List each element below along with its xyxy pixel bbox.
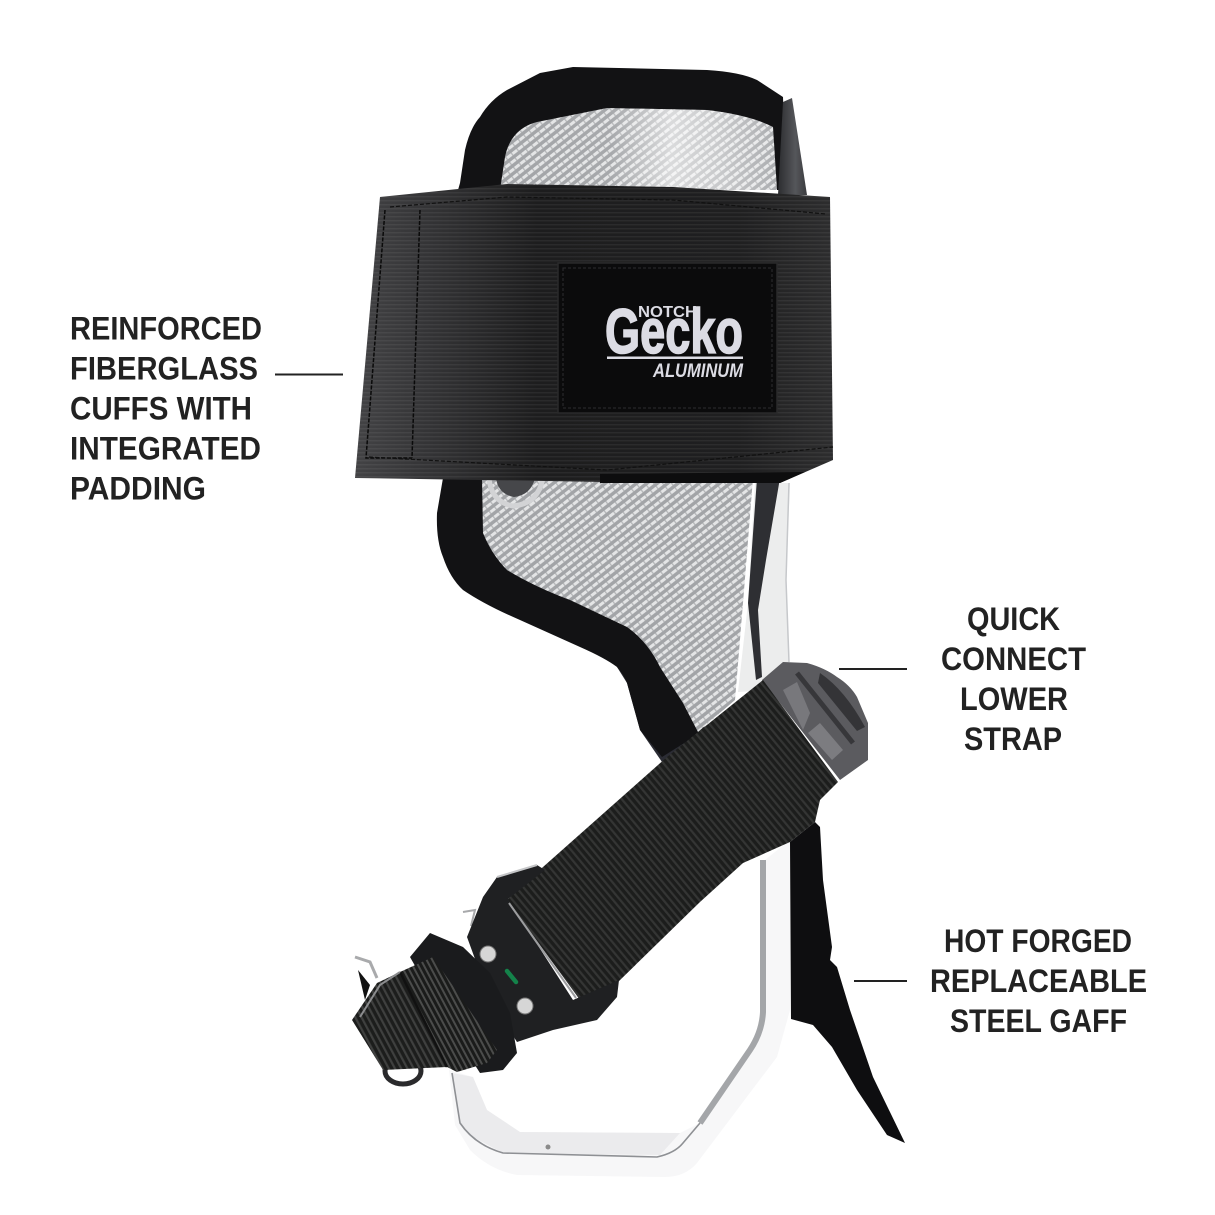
callout: hot forged replaceable steel gaff: STEEL GAFF [950,1003,1127,1039]
lower fiberglass cuff panel [482,478,753,732]
callout: hot forged replaceable steel gaff: REPLACEABLE [930,963,1147,999]
lower buckle jaw [410,933,517,1073]
callout: reinforced fiberglass cuffs: INTEGRATED [70,430,261,466]
callout: quick connect lower strap: STRAP [964,721,1062,757]
D-ring [489,478,543,506]
callout: quick connect lower strap: CONNECT [941,641,1086,677]
strap tail webbing [352,957,497,1072]
logo: Gecko: Gecko [605,297,743,367]
callout: quick connect lower strap: LOWER [960,681,1068,717]
callout: hot forged replaceable steel gaff [854,923,1147,1039]
woven logo patch [558,263,777,413]
lower nylon strap [507,680,838,1000]
product photo: climbing gaff [352,67,905,1177]
small latch tab [463,910,475,926]
aluminum stirrup frame [449,483,790,1177]
callout: reinforced fiberglass cuffs [70,310,343,506]
callout: quick connect lower strap [839,601,1086,757]
callout: hot forged replaceable steel gaff: HOT FORGED [944,923,1132,959]
callout: quick connect lower strap: QUICK [967,601,1060,637]
hot forged steel gaff [790,822,905,1143]
upper fiberglass cuff panel [500,108,777,190]
dark frame bar beside lower cuff [748,478,780,680]
lower cuff padding [437,470,705,757]
cap stitched patches [783,682,810,730]
D-rings and hook at strap tail [355,957,421,1084]
green lock indicator [507,971,516,982]
callout: reinforced fiberglass cuffs: PADDING [70,470,206,506]
logo: Aluminum: ALUMINUM [652,361,744,382]
lower cuff back shell [617,650,700,762]
cap dark pad [818,673,865,731]
logo rule [607,356,743,359]
rivets [480,946,496,962]
upper cuff padding [458,67,786,190]
callout: reinforced fiberglass cuffs: FIBERGLASS [70,350,258,386]
buckle [410,865,619,1073]
quick connect lower strap end cap [762,662,868,780]
callout: reinforced fiberglass cuffs: CUFFS WITH [70,390,252,426]
wide upper cuff strap [355,184,833,483]
frame rivet mark [546,1144,550,1150]
upper dark strut [778,98,807,195]
callout: reinforced fiberglass cuffs: REINFORCED [70,310,262,346]
logo: Notch: NOTCH [638,304,697,321]
